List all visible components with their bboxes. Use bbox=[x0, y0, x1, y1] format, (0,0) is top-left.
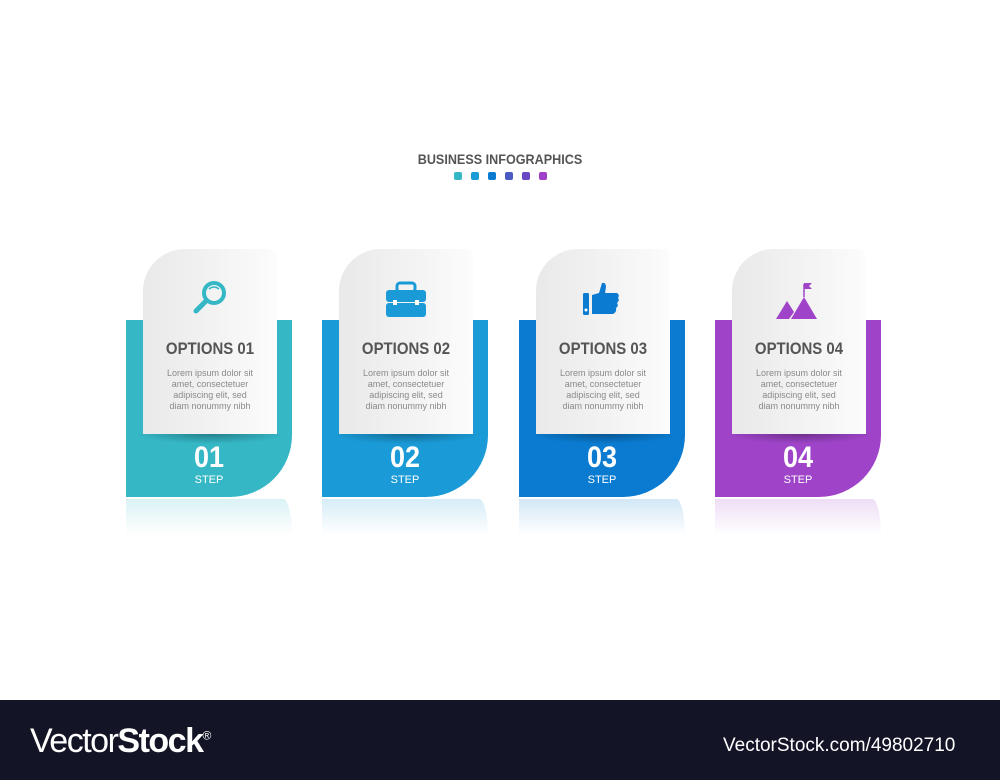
panel: step 04 bbox=[715, 249, 881, 526]
text block: adipiscing elit, sed bbox=[173, 390, 247, 400]
url: VectorStock.com/49802710 bbox=[723, 735, 955, 756]
color dots bbox=[454, 172, 547, 180]
number: 03 bbox=[587, 441, 617, 474]
text block: amet, consectetuer bbox=[761, 379, 837, 389]
icon: briefcase bbox=[386, 282, 426, 317]
panel: step 01 bbox=[126, 249, 292, 527]
text block: amet, consectetuer bbox=[565, 379, 641, 389]
number: 01 bbox=[194, 441, 224, 474]
text block: diam nonummy nibh bbox=[758, 401, 840, 411]
text block: Lorem ipsum dolor sit bbox=[167, 368, 253, 378]
logo: VectorStock® bbox=[30, 722, 210, 760]
text block: Lorem ipsum dolor sit bbox=[756, 368, 842, 378]
text block: Lorem ipsum dolor sit bbox=[363, 368, 449, 378]
heading: OPTIONS 04 bbox=[755, 339, 843, 358]
panel: step 02: STEP bbox=[391, 474, 419, 486]
panel: step 02 bbox=[322, 249, 488, 528]
footer bar bbox=[0, 700, 1000, 780]
text block: Lorem ipsum dolor sit bbox=[560, 368, 646, 378]
text block: adipiscing elit, sed bbox=[762, 390, 836, 400]
icon: magnifier bbox=[194, 281, 226, 314]
heading: OPTIONS 02 bbox=[362, 339, 450, 358]
heading: OPTIONS 01 bbox=[166, 339, 254, 358]
text block: adipiscing elit, sed bbox=[369, 390, 443, 400]
icon: thumbs up bbox=[583, 282, 619, 315]
text block bbox=[363, 368, 449, 411]
text block bbox=[756, 368, 842, 411]
panel: step 04: STEP bbox=[784, 474, 812, 486]
panel: step 01: STEP bbox=[195, 474, 223, 486]
text block: diam nonummy nibh bbox=[562, 401, 644, 411]
text block bbox=[560, 368, 646, 411]
panel: step 03: STEP bbox=[588, 474, 616, 486]
panel: step 03 bbox=[519, 249, 685, 528]
text block: amet, consectetuer bbox=[368, 379, 444, 389]
title: BUSINESS INFOGRAPHICS bbox=[418, 151, 582, 167]
text block: amet, consectetuer bbox=[172, 379, 248, 389]
heading: OPTIONS 03 bbox=[559, 339, 647, 358]
text block bbox=[167, 368, 253, 411]
text block: diam nonummy nibh bbox=[169, 401, 251, 411]
icon: mountain flag bbox=[776, 283, 817, 319]
text block: adipiscing elit, sed bbox=[566, 390, 640, 400]
text block: diam nonummy nibh bbox=[365, 401, 447, 411]
number: 04 bbox=[783, 441, 813, 474]
number: 02 bbox=[390, 441, 420, 474]
